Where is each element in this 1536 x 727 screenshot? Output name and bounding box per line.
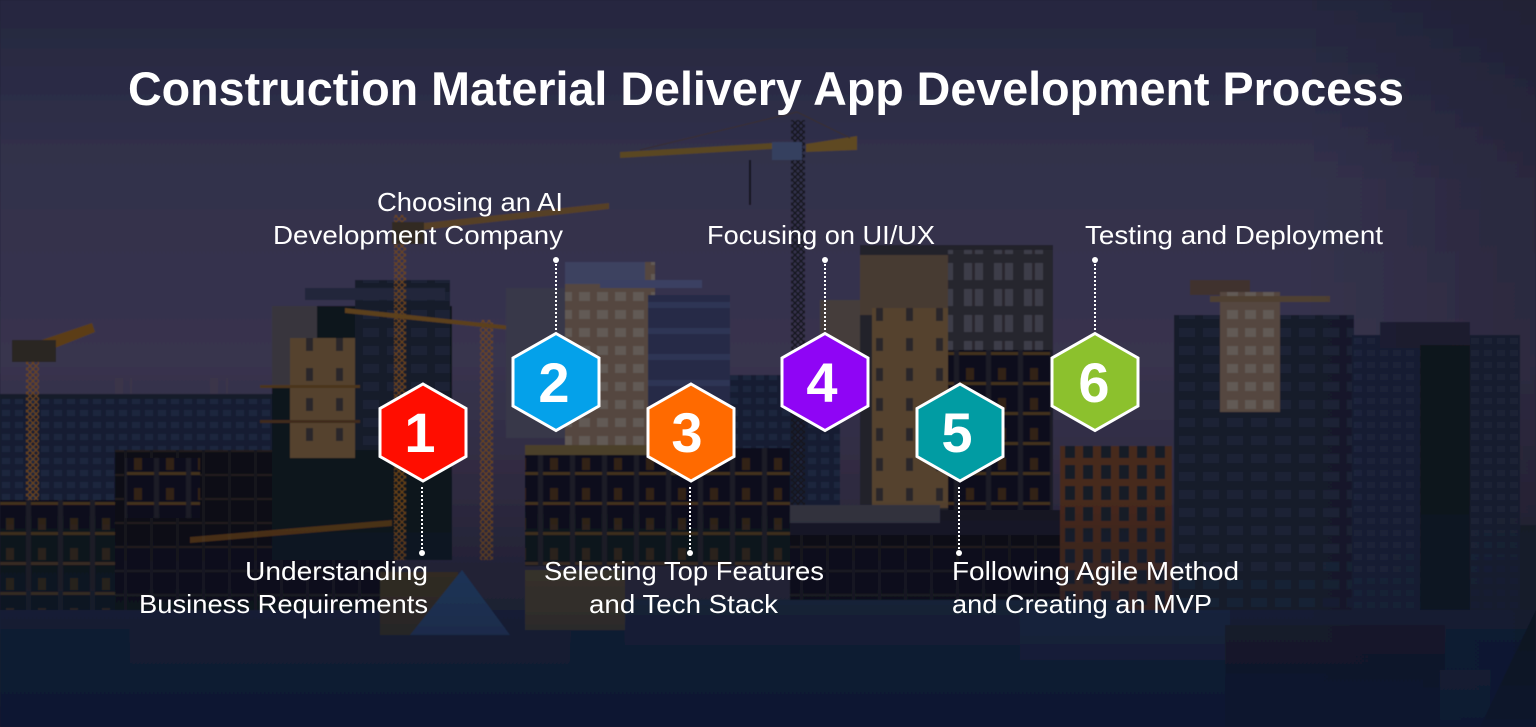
foreground rooftops: [0, 570, 1536, 727]
central tower crane: [620, 112, 857, 530]
hexagon 5: [917, 384, 1003, 481]
label 6: Testing and Deployment: [1085, 220, 1384, 250]
distant horizontal block at left: [0, 378, 275, 564]
label 3: Selecting Top Features: [544, 556, 824, 586]
right towers: [1174, 280, 1536, 635]
hexagon 3: [648, 384, 734, 481]
unfinished left blocks: [0, 450, 395, 640]
connector 5: [956, 487, 962, 556]
step 6: testing and deployment: [1052, 220, 1384, 430]
building under construction, centre right: [790, 245, 1060, 615]
number 6: 6: [1078, 351, 1110, 414]
number 2: 2: [538, 351, 570, 414]
tower under construction, left: [260, 280, 452, 560]
connector 4: [822, 257, 828, 330]
label 5: and Creating an MVP: [952, 589, 1212, 619]
cranes centre left: [190, 203, 609, 560]
number 4: 4: [806, 351, 838, 414]
brick building: [1060, 446, 1172, 616]
label 2: Choosing an AI: [377, 187, 563, 217]
step 1: understanding business requirements: [139, 384, 466, 619]
step 4: focusing on UI/UX: [707, 220, 935, 430]
hexagon 1: [380, 384, 466, 481]
connector 1: [419, 487, 425, 556]
label 5: Following Agile Method: [952, 556, 1239, 586]
step 2: choosing an AI development company: [273, 187, 599, 430]
label 3: and Tech Stack: [589, 589, 779, 619]
crane far left: [12, 323, 95, 645]
connector 2: [553, 257, 559, 330]
label 1: Understanding: [245, 556, 428, 586]
mid podium frame: [525, 445, 790, 566]
hexagon 4: [782, 334, 868, 430]
label 1: Business Requirements: [139, 589, 428, 619]
title: Construction Material Delivery App Development Process: [128, 62, 1404, 115]
label 2: Development Company: [273, 220, 563, 250]
hexagon 6: [1052, 334, 1138, 430]
step 5: following agile method and creating an MVP: [917, 384, 1239, 619]
mid tan and blue tower: [506, 262, 840, 525]
number 3: 3: [671, 401, 703, 464]
label 4: Focusing on UI/UX: [707, 220, 935, 250]
number 1: 1: [404, 401, 436, 464]
step 3: selecting top features and tech stack: [544, 384, 824, 619]
number 5: 5: [941, 401, 973, 464]
connector 3: [687, 487, 693, 556]
connector 6: [1092, 257, 1098, 330]
hexagon 2: [513, 334, 599, 430]
